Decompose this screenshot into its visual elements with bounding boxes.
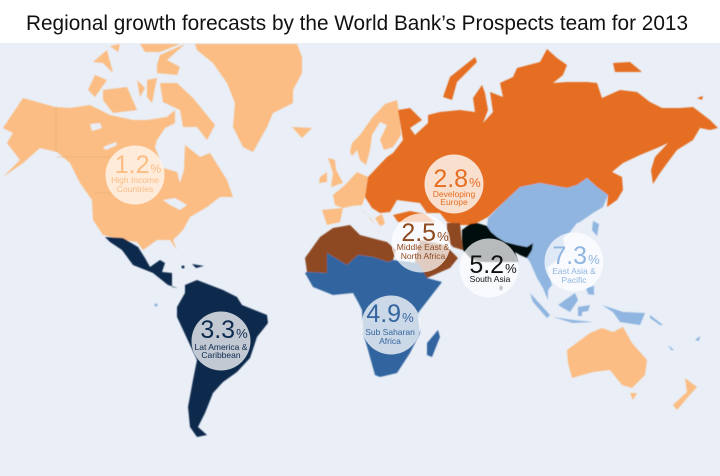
region: Latin America and Caribbean (105, 237, 268, 437)
region: Sub-Saharan Africa (305, 253, 442, 377)
region: high income countries (3, 44, 697, 410)
callout: Sub-Saharan Africa: Sub Saharan (365, 327, 415, 337)
callout: Middle East and North Africa: 2.5% (401, 219, 449, 247)
callout: Middle East and North Africa: Middle East & (397, 242, 450, 252)
callout: developing Europe: Europe (440, 197, 468, 207)
title: Regional growth forecasts by the World Bank’s Prospects team for 2013 (26, 12, 688, 35)
callout: East Asia and Pacific (544, 232, 604, 292)
callout: Sub-Saharan Africa: Africa (379, 336, 401, 346)
region: South Asia (462, 223, 533, 290)
callout: Latin America and Caribbean: Lat America & (195, 342, 248, 352)
callout: Middle East and North Africa: North Africa (401, 251, 445, 261)
callout: East Asia and Pacific: 7.3% (552, 242, 600, 270)
callout: developing Europe: 2.8% (433, 165, 481, 193)
region: Middle East and North Africa (305, 223, 463, 278)
callout: South Asia (460, 238, 518, 298)
region: East Asia and Pacific (154, 178, 700, 350)
callout: developing Europe: Developing (433, 189, 476, 199)
callout: high income countries: 1.2% (115, 151, 162, 179)
callout: high income countries: High Income (111, 175, 159, 185)
callout: South Asia: 5.2% (469, 251, 517, 279)
callout: Latin America and Caribbean: Caribbean (201, 350, 241, 360)
callout: Latin America and Caribbean (192, 312, 250, 370)
callout: South Asia: South Asia (470, 274, 511, 284)
callout: Latin America and Caribbean: 3.3% (200, 316, 248, 344)
callout: high income countries (106, 146, 164, 204)
callout: East Asia and Pacific: East Asia & (552, 266, 596, 276)
callout: developing Europe (424, 154, 484, 214)
borders (56, 107, 110, 193)
lakes (90, 123, 187, 210)
region: developing Europe (365, 49, 718, 225)
callout: Middle East and North Africa (392, 214, 450, 272)
callout: high income countries: Countries (117, 184, 153, 194)
callout: East Asia and Pacific: Pacific (561, 275, 587, 285)
callout: Sub-Saharan Africa: 4.9% (366, 300, 414, 328)
callout: Sub-Saharan Africa (362, 296, 420, 354)
